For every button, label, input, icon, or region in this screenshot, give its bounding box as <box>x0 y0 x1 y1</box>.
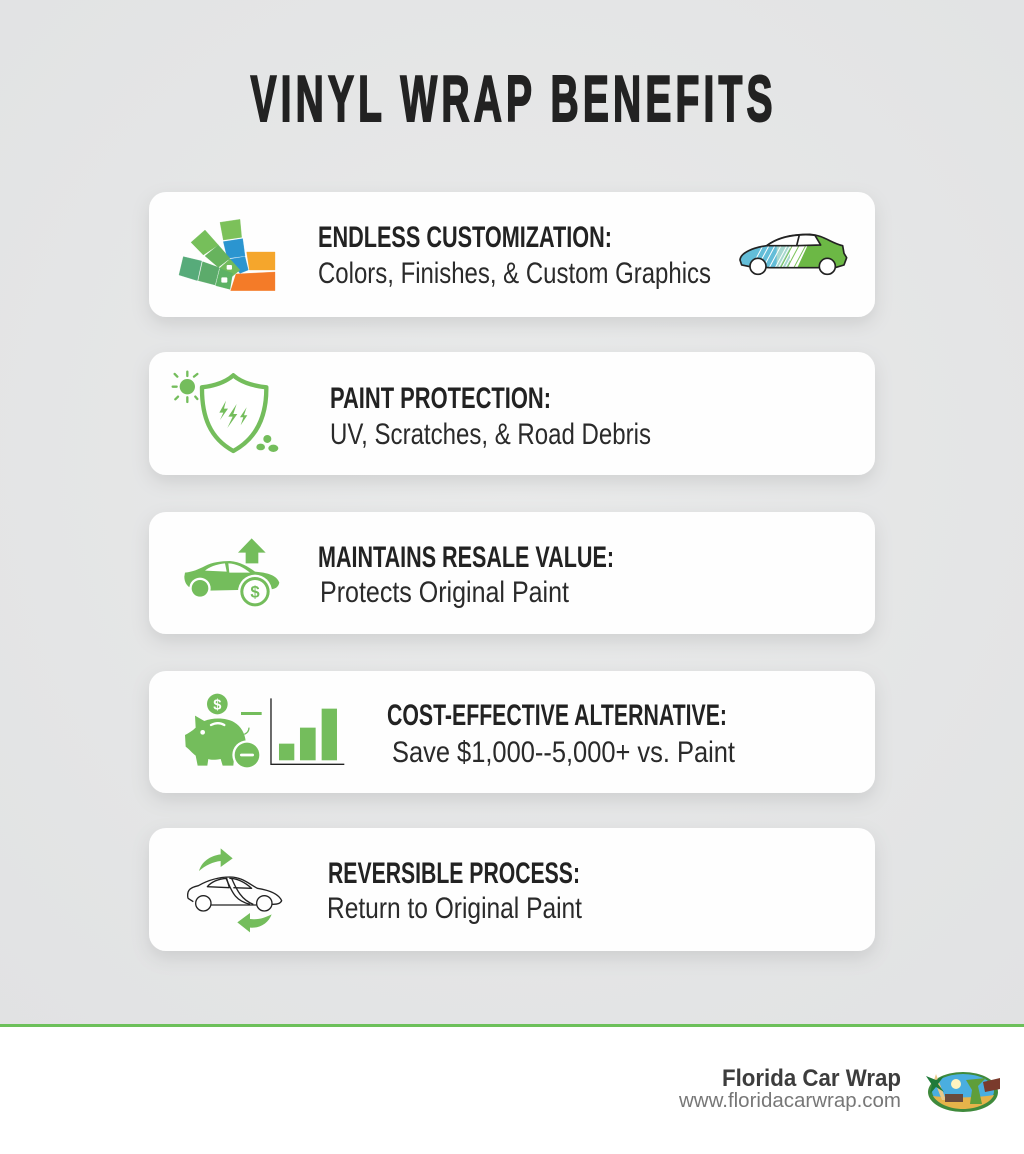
heading: maintains resale value: MAINTAINS RESALE VALUE: <box>318 541 614 574</box>
text: customization detail: Colors, Finishes, & Custom Graphics <box>318 257 711 290</box>
title: VINYL WRAP BENEFITS <box>250 63 773 136</box>
text: cost detail: Save $1,000--5,000+ vs. Paint <box>392 736 736 769</box>
icon: piggy bank: $ <box>213 697 221 713</box>
footer band <box>0 1024 1024 1154</box>
icon: car with up arrow and dollar coin: $ <box>250 583 260 602</box>
heading: paint protection: PAINT PROTECTION: <box>330 382 551 415</box>
logo: florida car wrap badge <box>926 1072 1000 1112</box>
icon: car outline with circular arrows <box>188 848 282 932</box>
text: protection detail: UV, Scratches, & Road Debris <box>330 418 651 451</box>
panel: maintains resale value <box>149 512 875 634</box>
footer website: www.floridacarwrap.com <box>678 1090 901 1112</box>
icon: shield with sun and debris <box>173 372 278 452</box>
heading: endless customization: ENDLESS CUSTOMIZATION: <box>318 221 612 254</box>
heading: reversible process: REVERSIBLE PROCESS: <box>328 857 580 890</box>
icon: piggy bank <box>185 694 262 770</box>
icon: colour swatch fan <box>179 219 275 291</box>
icon: car with up arrow and dollar coin <box>184 538 279 609</box>
text: resale detail: Protects Original Paint <box>320 576 570 609</box>
heading: cost-effective alternative: COST-EFFECTIVE ALTERNATIVE: <box>387 699 727 732</box>
panel: cost-effective alternative <box>149 671 875 793</box>
text: reversible detail: Return to Original Paint <box>327 892 583 925</box>
panel: paint protection <box>149 352 875 475</box>
chart: rising bars <box>271 698 344 764</box>
panel: endless customization <box>149 192 875 317</box>
icon: half wrapped car <box>738 234 847 274</box>
panel: reversible process <box>149 828 875 951</box>
footer brand name: Florida Car Wrap <box>722 1065 901 1092</box>
